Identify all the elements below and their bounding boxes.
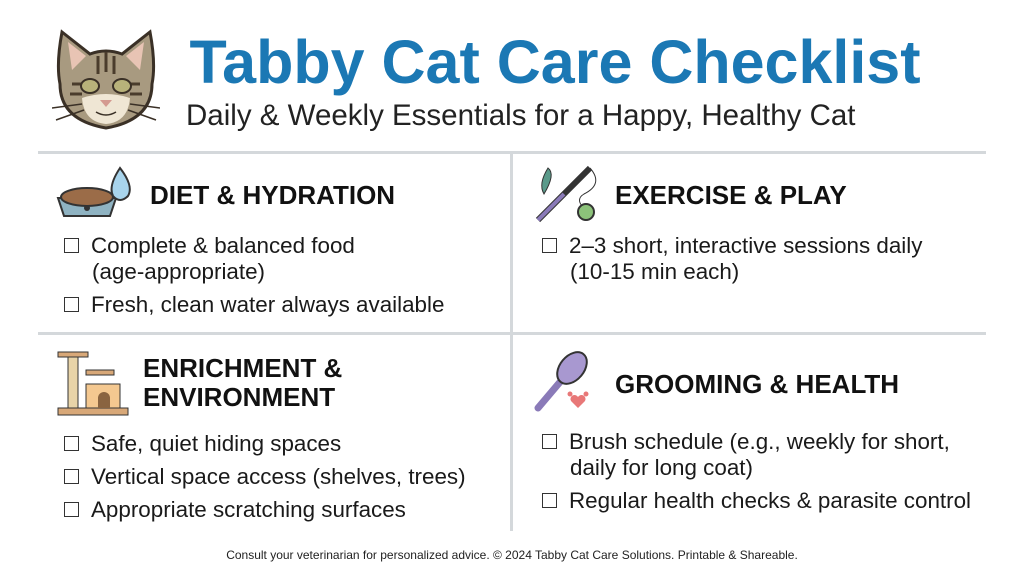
- title: Tabby Cat Care Checklist: [189, 28, 921, 96]
- items: 2–3 short, interactive sessions daily: [569, 233, 922, 258]
- heading: DIET & HYDRATION: [150, 180, 395, 210]
- heading: GROOMING & HEALTH: [615, 369, 899, 399]
- items: Safe, quiet hiding spaces: [91, 431, 341, 456]
- icon: cat head: [52, 29, 160, 130]
- icon: food bowl and water drop: [56, 166, 131, 217]
- heading: ENVIRONMENT: [143, 382, 335, 412]
- items: Complete & balanced food: [91, 233, 355, 258]
- icon: brush and paw: [534, 351, 588, 412]
- subtitle: Daily & Weekly Essentials for a Happy, Healthy Cat: [186, 99, 855, 132]
- heading: [143, 353, 342, 412]
- icon: wand toy: [536, 166, 596, 222]
- items: Vertical space access (shelves, trees): [91, 464, 466, 489]
- heading: EXERCISE & PLAY: [615, 180, 847, 210]
- panel: diet & hydration: [56, 166, 444, 317]
- items: Fresh, clean water always available: [91, 292, 444, 317]
- footer: Consult your veterinarian for personalized advice. © 2024 Tabby Cat Care Solutions. Printable & Shareable.: [226, 548, 798, 562]
- items: Regular health checks & parasite control: [569, 488, 971, 513]
- items: (age-appropriate): [92, 259, 265, 284]
- items: Appropriate scratching surfaces: [91, 497, 406, 522]
- items: [542, 429, 971, 513]
- panel: enrichment & environment: [58, 352, 466, 522]
- items: (10-15 min each): [570, 259, 739, 284]
- items: Brush schedule (e.g., weekly for short,: [569, 429, 950, 454]
- heading: ENRICHMENT &: [143, 353, 342, 383]
- items: daily for long coat): [570, 455, 753, 480]
- panel: grooming & health: [534, 351, 971, 513]
- items: [64, 233, 444, 317]
- items: [542, 233, 922, 284]
- items: [64, 431, 466, 522]
- panel: exercise & play: [536, 166, 922, 284]
- icon: cat tree: [58, 352, 128, 416]
